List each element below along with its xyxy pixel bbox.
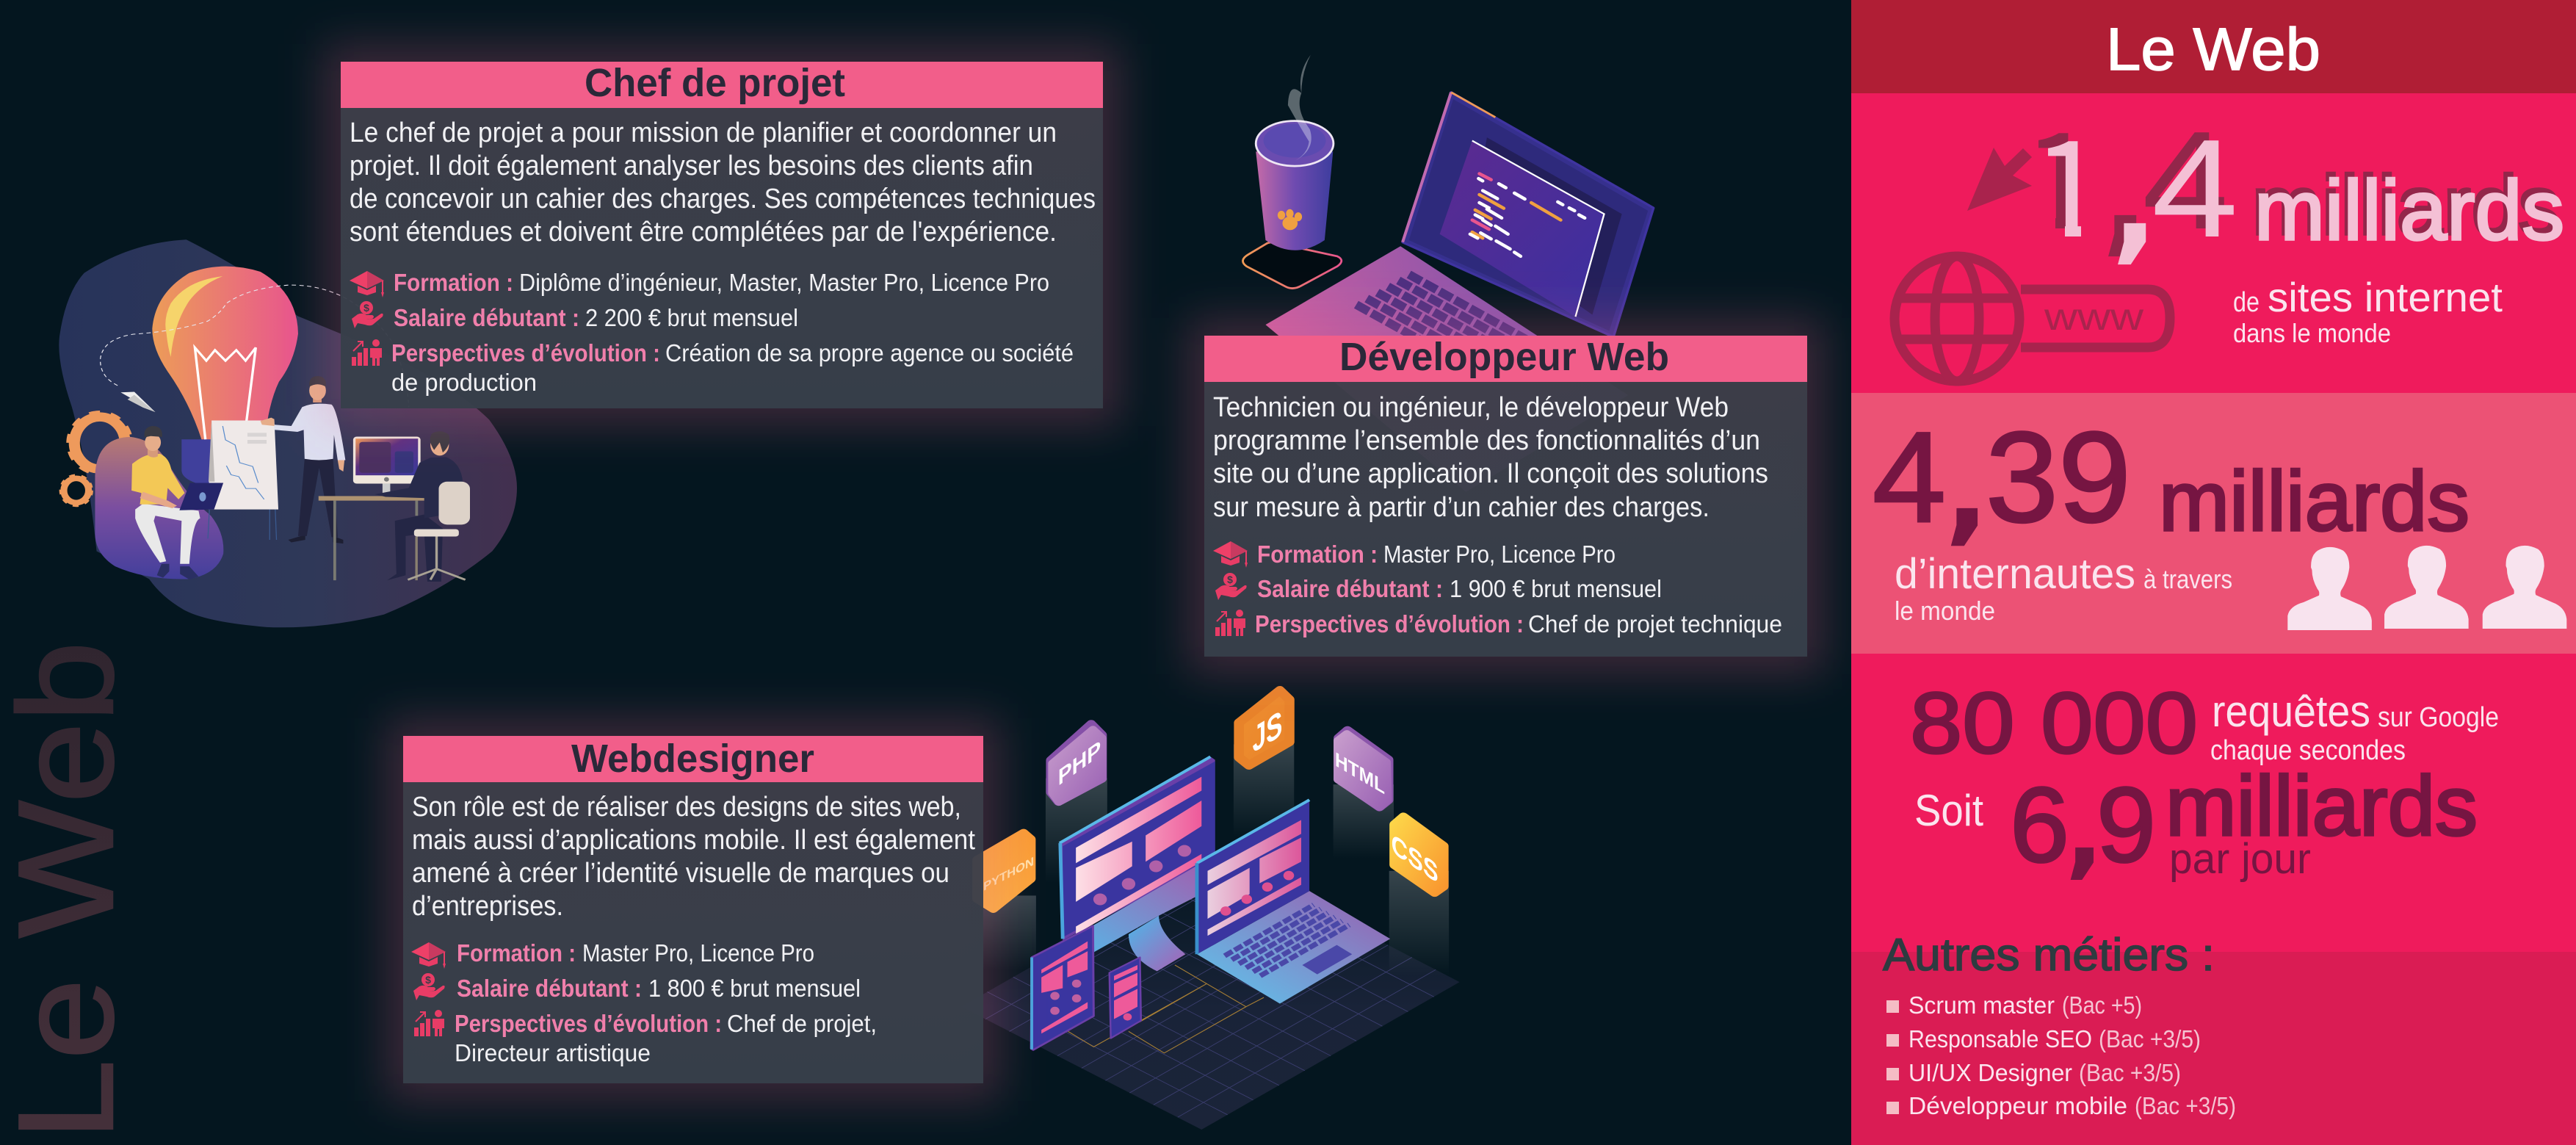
stat section: requetes Google [1851,654,2576,952]
perspectives line: Perspectives d’évolution : [391,339,660,366]
heading bar [403,736,983,782]
card background [1204,382,1807,657]
arrow icon [1967,148,2032,211]
heading: Webdesigner [571,737,814,781]
icon: career growth [352,339,382,366]
number 1,4: , [2111,131,2159,277]
perspectives line: Directeur artistique [455,1039,651,1066]
icon: three people [2287,546,2566,630]
illustration: coffee cup and laptop [1243,55,1654,492]
card background [403,782,983,1083]
word milliards: milliards [2251,159,2560,253]
light beams [983,744,1449,976]
icon: career growth [414,1010,444,1036]
caption: requetes [1914,687,2499,835]
description: de concevoir un cahier des charges. Ses compétences techniques [350,184,1096,214]
description: d’entreprises. [412,891,563,922]
icon: salary hand: $ [1227,574,1233,585]
desk with monitor [319,436,425,580]
number 6,9: , [2067,782,2102,888]
person: seated at desk with chair [375,431,470,582]
number 1,4 [2038,132,2234,264]
grid floor [961,859,1460,1130]
salary line [457,975,861,1002]
number 1,4: 4 [2142,103,2229,259]
description: site ou d’une application. Il conçoit des solutions [1213,458,1768,489]
formation line: Formation : [394,269,513,296]
perspectives line: Perspectives d’évolution : [1255,610,1524,637]
salary line: 2 200 € brut mensuel [585,304,798,331]
job list: Développeur mobile [1909,1092,2127,1119]
number 4,39: 39 [1986,406,2131,549]
salary line: Salaire débutant : [1257,575,1443,602]
job list: Responsable SEO [1909,1025,2092,1052]
salary line [394,304,798,331]
heading bar [341,62,1103,108]
salary line: 1 800 € brut mensuel [648,975,861,1002]
description [350,118,1096,248]
description: sur mesure à partir d’un cahier des charges. [1213,492,1710,523]
tag: HTML: HTML [1335,747,1385,799]
number 6,9: 6 [2010,765,2069,884]
number 4,39: , [1947,430,1987,555]
tag: CSS [1392,817,1444,892]
job list: (Bac +3/5) [2099,1025,2201,1052]
tag: JS: JS [1253,703,1282,761]
icon: salary hand: $ [363,302,369,314]
description: Son rôle est de réaliser des designs de sites web, [412,792,961,823]
dashed flight path and paper plane [101,285,409,412]
caption: requetes: requêtes [2212,687,2370,736]
sidebar: Le Web statistics [1851,0,2576,1145]
caption: requetes: Soit [1914,786,1983,835]
salary line: Salaire débutant : [394,304,579,331]
caption: sites internet: sites internet [2268,274,2503,320]
perspectives line: Chef de projet technique [1528,610,1782,637]
word milliards: milliards [2159,455,2470,549]
icon: globe www search bar: www [2044,296,2144,339]
laptop [1197,800,1390,1004]
glow behind cards [323,44,1825,1101]
gears [62,413,130,505]
perspectives line: Perspectives d’évolution : [455,1010,722,1037]
description: sont étendues et doivent être complétées par de l'expérience. [350,217,1057,248]
caption: sites internet: dans le monde [2233,318,2391,348]
perspectives line [455,1010,877,1066]
seat blob [95,437,223,579]
heading: Chef de projet [585,61,845,105]
tag: HTML [1335,731,1389,807]
icon: globe www search bar [1895,256,2170,381]
panel: Webdesigner [403,736,983,1083]
heading: autres metiers: Autres métiers : [1883,930,2215,980]
tag: PYTHON: PYTHON [983,854,1034,894]
number 6,9 [2010,765,2156,888]
panel: Développeur Web [1204,335,1807,657]
number 4,39 [1873,406,2131,555]
card background [341,108,1103,408]
perspectives line: Création de sa propre agence ou société [665,339,1074,366]
perspectives line [1255,610,1782,637]
sidebar header band [1851,0,2576,93]
job list: UI/UX Designer [1909,1059,2072,1086]
flip chart [208,420,278,540]
icon: salary hand [413,973,445,1000]
job list: (Bac +5) [2062,992,2142,1019]
formation line: Diplôme d’ingénieur, Master, Master Pro, Licence Pro [519,269,1049,296]
perspectives line: de production [391,369,537,396]
panel: Chef de projet [341,61,1103,408]
person: seated with laptop [131,426,223,579]
tag: PHP [1051,724,1102,802]
dark background blob [59,239,517,627]
coaster [1243,242,1342,289]
coffee cup [1256,55,1334,250]
tag: PYTHON [977,834,1034,909]
icon: salary hand: $ [425,974,431,986]
icon: graduation cap [1213,541,1248,568]
formation line: Master Pro, Licence Pro [582,939,814,967]
job list [1886,992,2236,1119]
caption: sites internet [2233,274,2503,348]
job list: (Bac +3/5) [2135,1092,2236,1119]
salary line: 1 900 € brut mensuel [1450,575,1662,602]
description: programme l’ensemble des fonctionnalités d’un [1213,425,1760,456]
number 4,39: 4 [1873,406,1946,549]
icon: graduation cap [411,942,446,969]
number 80 000: 80 000 [1910,675,2198,772]
description: projet. Il doit également analyser les besoins des clients afin [350,151,1033,181]
laptop base [1265,246,1628,492]
tag: CSS: CSS [1392,827,1439,889]
formation line: Formation : [1257,541,1378,568]
number 1,4: , [2102,123,2149,269]
number 1,4: 4 [2152,111,2238,267]
number 6,9: 9 [2096,765,2156,884]
salary line: Salaire débutant : [457,975,642,1002]
caption: internautes: le monde [1895,596,1995,626]
caption: sites internet: de [2233,287,2260,318]
caption: internautes: à travers [2143,564,2232,594]
formation line [1257,541,1616,568]
number 1,4: 1 [2022,74,2096,267]
icon: salary hand [1215,573,1247,600]
description [1213,392,1768,523]
heading: Développeur Web [1339,335,1669,379]
tag: JS [1239,690,1289,765]
person: standing presenter [261,376,345,543]
description: Le chef de projet a pour mission de planifier et coordonner un [350,118,1057,148]
perspectives line: Chef de projet, [727,1010,877,1037]
illustration: team around a light bulb [59,239,517,627]
perspectives line [391,339,1074,396]
caption: requetes: chaque secondes [2210,735,2406,766]
description: amené à créer l’identité visuelle de marques ou [412,858,949,889]
job list: (Bac +3/5) [2079,1059,2181,1086]
formation line: Formation : [457,939,576,967]
word milliards: milliards [2254,164,2564,258]
word milliards: milliards [2166,759,2478,853]
icon: salary hand [352,301,383,328]
description: mais aussi d’applications mobile. Il est également [412,825,975,856]
tablet [1031,926,1093,1050]
icon: career growth [1215,610,1245,636]
heading bar [1204,336,1807,382]
job list: Scrum master [1909,992,2055,1019]
section: autres metiers [1851,930,2576,1145]
caption: internautes [1895,550,2232,626]
sidebar header band: Le Web [2106,16,2320,83]
icon: graduation cap [350,271,384,297]
light bulb [152,267,298,483]
monitor [1060,756,1215,971]
description: Technicien ou ingénieur, le développeur Web [1213,392,1729,423]
caption: par jour: par jour [2169,835,2311,883]
illustration: isometric devices and languages [961,690,1460,1130]
tag: PHP: PHP [1058,734,1101,791]
stat section: internautes [1851,393,2576,654]
number 1,4: 1 [2032,82,2106,275]
formation line [457,939,814,967]
description [412,792,975,922]
caption: requetes: sur Google [2378,702,2499,733]
laptop screen with code [1403,93,1654,337]
formation line: Master Pro, Licence Pro [1383,541,1616,568]
caption: internautes: d’internautes [1895,550,2135,598]
salary line [1257,575,1662,602]
phone [1110,957,1141,1039]
stat section: sites internet [1851,74,2576,393]
